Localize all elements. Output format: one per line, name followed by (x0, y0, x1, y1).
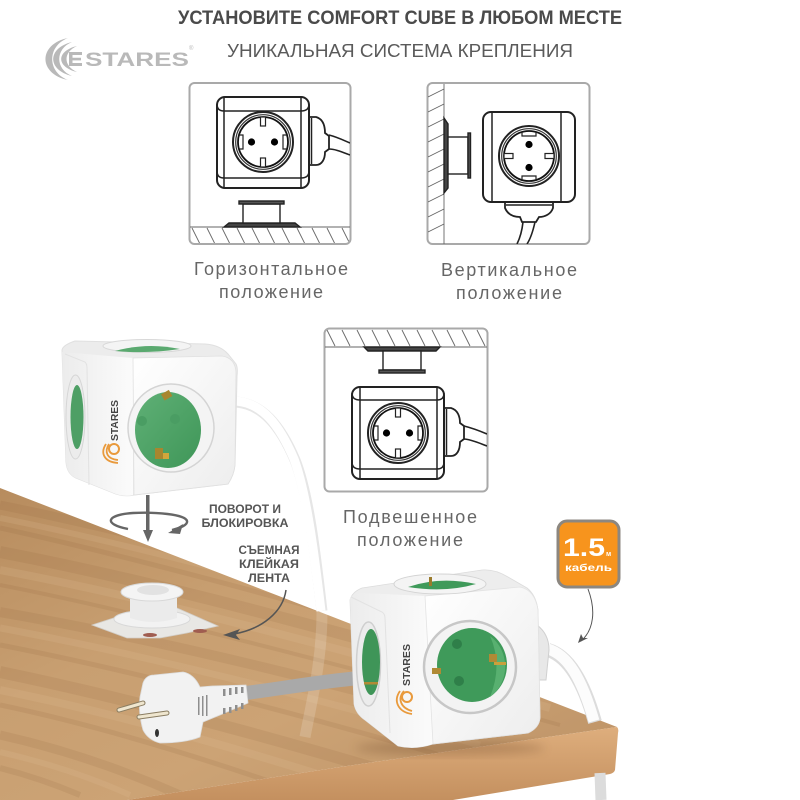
label: vertical position (441, 260, 577, 303)
logo: Estares grey (46, 38, 194, 80)
table top (0, 488, 617, 800)
plug grip (198, 687, 244, 716)
label: hanging position: положение (357, 530, 463, 550)
upper cube cable (236, 401, 322, 737)
label: horizontal position: положение (219, 282, 323, 302)
cube body (62, 341, 237, 496)
cable length badge: м (606, 551, 611, 558)
cable (329, 135, 350, 155)
label: horizontal position: Горизонтальное (194, 259, 348, 279)
cable length badge: 1.5 (563, 534, 605, 562)
mount base (444, 118, 470, 193)
plug cable (245, 678, 360, 693)
adhesive tape arrow (223, 590, 286, 640)
top socket (103, 340, 191, 352)
socket (368, 403, 428, 463)
mount base (224, 201, 300, 227)
panel: vertical mounting diagram (428, 83, 590, 244)
cube outline (483, 112, 575, 205)
cable collar (444, 408, 464, 456)
cable length badge: кабель (565, 562, 612, 574)
label: removable adhesive tape (238, 543, 300, 585)
title: УСТАНОВИТЕ COMFORT CUBE В ЛЮБОМ МЕСТЕ (178, 8, 622, 29)
cable length badge (558, 521, 619, 587)
subtitle: УНИКАЛЬНАЯ СИСТЕМА КРЕПЛЕНИЯ (227, 40, 573, 61)
label: rotate and lock: БЛОКИРОВКА (202, 516, 289, 530)
brand mark: STARES (402, 644, 413, 686)
label: removable adhesive tape: ЛЕНТА (248, 571, 290, 585)
left socket (356, 622, 380, 706)
cable (464, 426, 487, 446)
cable (517, 222, 535, 244)
wooden table (0, 488, 618, 800)
cable collar (505, 202, 553, 222)
front socket (128, 384, 214, 472)
left face (62, 352, 133, 496)
front face (425, 587, 540, 744)
table front edge (127, 727, 618, 800)
left face frame (351, 597, 390, 733)
lower cube shadow (355, 741, 545, 755)
rotation arrow (111, 495, 187, 542)
cable collar (537, 625, 549, 680)
label: rotate and lock (202, 502, 289, 530)
label: vertical position: Вертикальное (441, 260, 577, 280)
label: hanging position (343, 507, 477, 550)
left face (350, 593, 433, 748)
front socket (424, 621, 516, 713)
wood grain (0, 516, 389, 798)
plug pins (119, 703, 167, 717)
cube body (350, 570, 540, 748)
socket (233, 112, 293, 172)
brand mark (103, 400, 121, 463)
logo: Estares grey: ® (189, 45, 194, 52)
top socket (394, 574, 486, 594)
cable collar (309, 117, 329, 165)
left socket (66, 375, 85, 459)
ceiling hatch (325, 330, 487, 347)
lower power cube (350, 570, 549, 748)
wall hatch (428, 83, 444, 244)
label: removable adhesive tape: СЪЕМНАЯ (238, 543, 300, 557)
brand mark: STARES (110, 400, 121, 441)
label: removable adhesive tape: КЛЕЙКАЯ (239, 556, 299, 571)
plug earth contact (155, 729, 159, 737)
label: horizontal position (194, 259, 348, 302)
left face frame (65, 354, 89, 485)
label: hanging position: Подвешенное (343, 507, 477, 527)
power plug (119, 672, 248, 743)
lower cube cable (548, 649, 601, 800)
cube outline (217, 97, 312, 188)
plug head (139, 672, 248, 743)
panel: horizontal mounting diagram (190, 83, 350, 244)
cable length arrow (578, 589, 593, 643)
logo: Estares grey: STARES (85, 50, 189, 71)
mount base (364, 347, 440, 373)
brand mark (397, 644, 413, 714)
mounting base photo (92, 583, 218, 638)
front face (133, 356, 236, 495)
label: vertical position: положение (456, 283, 562, 303)
label: rotate and lock: ПОВОРОТ И (209, 502, 281, 516)
upper power cube (62, 340, 237, 496)
panel: hanging mounting diagram (324, 328, 488, 492)
floor hatch (190, 227, 350, 244)
cube outline (352, 387, 446, 479)
socket (499, 126, 559, 186)
